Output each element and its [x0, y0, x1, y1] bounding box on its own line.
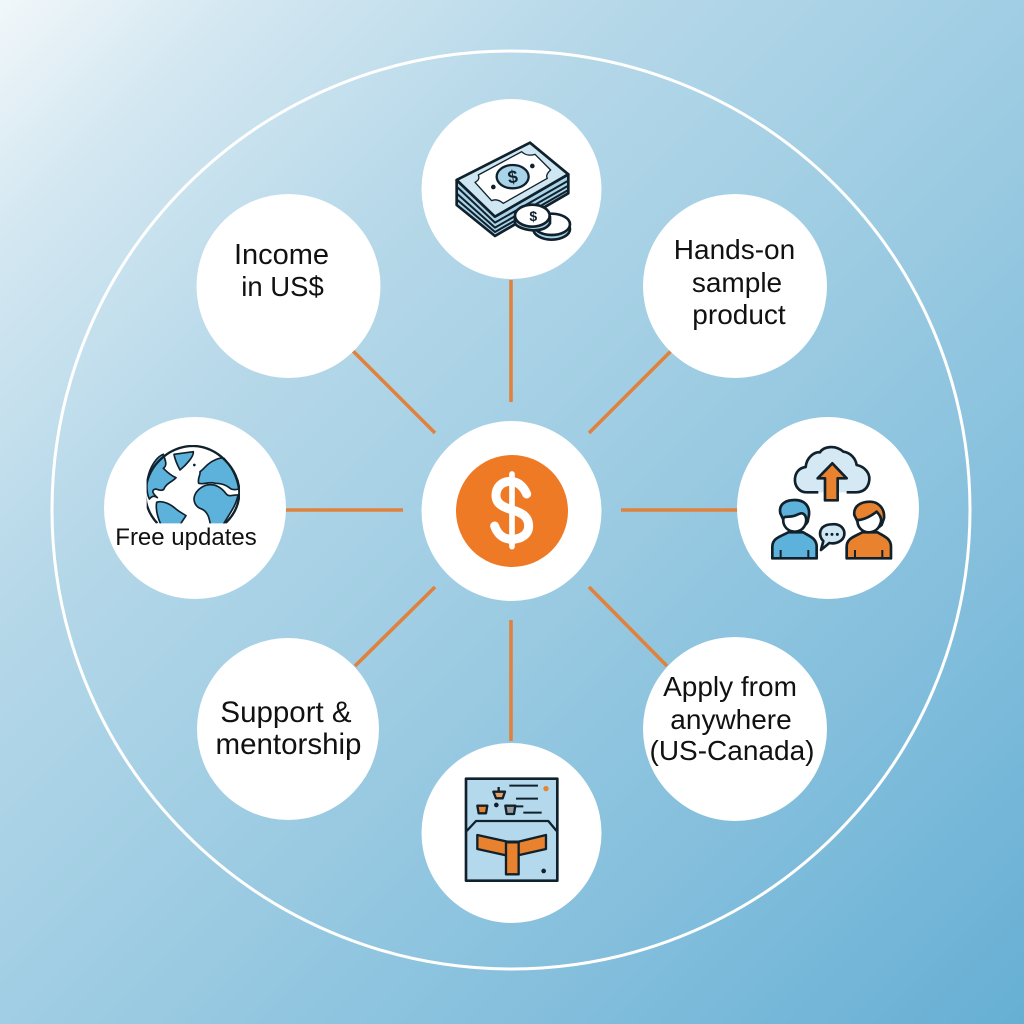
icon: banknotes and coins: $	[506, 166, 519, 188]
icon: globe	[146, 445, 240, 524]
label: income: Income	[234, 239, 329, 271]
icon: product screen	[466, 779, 557, 881]
label: apply from anywhere: (US-Canada)	[650, 735, 814, 766]
icon: banknotes and coins	[457, 143, 570, 240]
connector lines	[286, 280, 738, 741]
node: money stack icon	[422, 99, 602, 279]
label: hands-on sample product: sample	[692, 267, 782, 298]
label: support and mentorship: Support &	[220, 696, 352, 729]
icon: banknotes and coins: $	[529, 208, 537, 224]
label: support and mentorship: mentorship	[216, 728, 361, 761]
label: free updates: Free updates	[115, 524, 257, 551]
node: product screen icon	[422, 743, 602, 923]
node: apply from anywhere	[643, 637, 827, 821]
label: hands-on sample product: Hands-on	[674, 234, 795, 265]
node: income in US$	[196, 194, 380, 378]
label: apply from anywhere: Apply from	[663, 671, 797, 702]
node: people and cloud icon	[737, 417, 919, 599]
label: in US$: in US$	[241, 271, 324, 302]
label: hands-on sample product: product	[692, 299, 786, 330]
node: hands-on sample product	[643, 194, 827, 378]
icon: dollar sign	[495, 474, 529, 547]
node: center dollar	[422, 421, 602, 601]
icon: orange coin	[456, 455, 568, 567]
icon: collaboration	[772, 447, 891, 558]
node: free updates with globe	[104, 417, 286, 599]
node: support and mentorship	[197, 638, 379, 820]
label: apply from anywhere: anywhere	[670, 704, 792, 735]
